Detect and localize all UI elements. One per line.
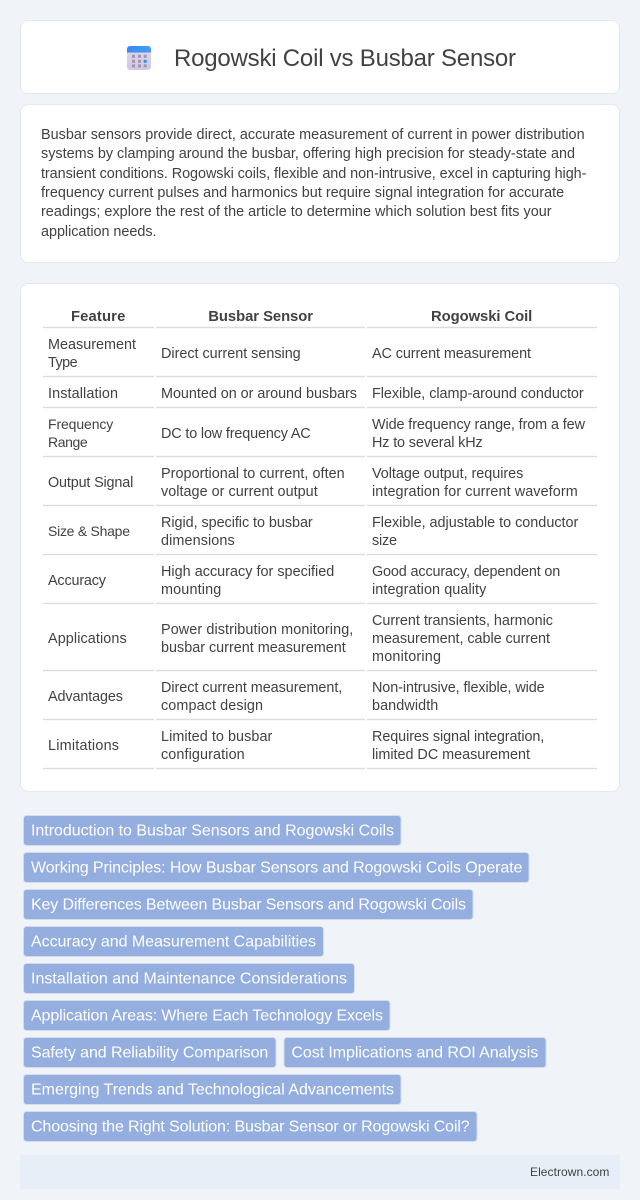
tag: key differences	[24, 890, 473, 920]
row: measurement type: Direct current sensing	[161, 346, 301, 362]
row: measurement type	[48, 337, 531, 371]
row: advantages: Non-intrusive, flexible, wide	[372, 680, 545, 696]
tag: accuracy	[24, 926, 324, 956]
row: frequency range: Range	[48, 434, 88, 450]
row: installation: Installation	[48, 386, 118, 402]
row: output signal: voltage or current output	[161, 484, 318, 500]
tag: installation	[24, 964, 354, 994]
row: limitations: Requires signal integration,	[372, 729, 544, 745]
footer bar	[20, 1155, 620, 1189]
row: applications	[48, 613, 553, 665]
row: advantages	[48, 680, 545, 714]
row: size and shape: Rigid, specific to busbar	[161, 515, 313, 531]
introduction text: systems by clamping around the busbar, offering high precision for steady-state and	[41, 146, 575, 162]
row: applications: busbar current measurement	[161, 640, 346, 656]
icon: calendar	[127, 46, 151, 70]
table header: Rogowski Coil	[431, 309, 532, 325]
row: frequency range	[48, 416, 586, 451]
introduction text: application needs.	[41, 224, 156, 240]
row: output signal: Output Signal	[48, 475, 133, 491]
row: output signal: Voltage output, requires	[372, 466, 523, 482]
introduction text: frequency current pulses and harmonics but require signal integration for accurate	[41, 185, 564, 201]
row: output signal: integration for current waveform	[372, 484, 578, 500]
title: Rogowski Coil vs Busbar Sensor	[174, 45, 516, 72]
tag: emerging trends: Emerging Trends and Technological Advancements	[31, 1082, 394, 1098]
row: output signal	[48, 466, 578, 500]
introduction text: Busbar sensors provide direct, accurate measurement of current in power distribution	[41, 127, 585, 143]
introduction text	[41, 127, 587, 240]
tag: emerging trends	[24, 1074, 401, 1104]
row: accuracy: Good accuracy, dependent on	[372, 564, 560, 580]
tag: cost	[284, 1038, 546, 1068]
row: advantages: bandwidth	[372, 698, 438, 714]
introduction text: transient conditions. Rogowski coils, flexible and non-intrusive, excel in capturing high-	[41, 166, 587, 182]
table row dividers	[43, 327, 597, 769]
row: limitations	[48, 729, 544, 763]
panel: introduction card	[20, 104, 620, 263]
row: limitations: configuration	[161, 747, 245, 763]
row: limitations: limited DC measurement	[372, 747, 530, 763]
footer credit: Electrown.com	[530, 1165, 609, 1179]
table header: Feature	[71, 309, 125, 325]
row: size and shape	[48, 515, 579, 549]
tag: introduction	[24, 816, 401, 846]
row: installation: Mounted on or around busbars	[161, 386, 357, 402]
row: limitations: Limited to busbar	[161, 729, 273, 745]
tag: choosing solution: Choosing the Right Solution: Busbar Sensor or Rogowski Coil?	[31, 1118, 470, 1136]
row: measurement type: AC current measurement	[372, 346, 531, 362]
tag: choosing solution	[24, 1112, 477, 1142]
row: measurement type: Measurement	[48, 337, 136, 353]
row: advantages: Advantages	[48, 689, 123, 705]
row: installation	[48, 386, 584, 402]
table header	[71, 309, 532, 325]
tag: application areas: Application Areas: Where Each Technology Excels	[31, 1008, 383, 1024]
introduction text: readings; explore the rest of the article to determine which solution best fits your	[41, 204, 552, 220]
row: advantages: Direct current measurement,	[161, 680, 342, 696]
row: measurement type: Type	[48, 355, 78, 371]
tag: working principles	[24, 852, 529, 882]
row: accuracy: integration quality	[372, 582, 487, 598]
row: accuracy: Accuracy	[48, 573, 107, 589]
row: size and shape: Size & Shape	[48, 523, 130, 539]
row: frequency range: DC to low frequency AC	[161, 426, 311, 442]
tag: cost: Cost Implications and ROI Analysis	[291, 1044, 538, 1062]
row: frequency range: Frequency	[48, 416, 113, 432]
row: limitations: Limitations	[48, 738, 119, 754]
row: size and shape: size	[372, 533, 397, 549]
tag: safety: Safety and Reliability Comparison	[31, 1044, 268, 1062]
tag: key differences: Key Differences Between Busbar Sensors and Rogowski Coils	[31, 896, 466, 914]
row: output signal: Proportional to current, often	[161, 466, 345, 482]
row: installation: Flexible, clamp-around conductor	[372, 386, 584, 402]
panel: comparison table card	[20, 283, 620, 792]
tag: working principles: Working Principles: How Busbar Sensors and Rogowski Coils Operate	[31, 860, 522, 876]
row: applications: measurement, cable current	[372, 631, 550, 647]
row: frequency range: Hz to several kHz	[372, 435, 483, 451]
table header: Busbar Sensor	[208, 309, 313, 325]
row: size and shape: dimensions	[161, 533, 235, 549]
header card	[20, 20, 620, 94]
row: applications: Applications	[48, 631, 127, 647]
tag: installation: Installation and Maintenance Considerations	[31, 970, 347, 988]
tag: accuracy: Accuracy and Measurement Capabilities	[31, 934, 316, 950]
row: frequency range: Wide frequency range, from a few	[372, 417, 586, 433]
row: accuracy	[48, 564, 560, 598]
row: applications: Power distribution monitoring,	[161, 622, 353, 638]
row: size and shape: Flexible, adjustable to conductor	[372, 515, 579, 531]
row: accuracy: mounting	[161, 582, 221, 598]
row: applications: Current transients, harmonic	[372, 613, 553, 629]
row: accuracy: High accuracy for specified	[161, 564, 334, 580]
tag: application areas	[24, 1000, 390, 1030]
row: advantages: compact design	[161, 698, 263, 714]
row: applications: monitoring	[372, 649, 441, 665]
tag: safety	[24, 1038, 276, 1068]
tag: introduction: Introduction to Busbar Sensors and Rogowski Coils	[31, 822, 394, 840]
